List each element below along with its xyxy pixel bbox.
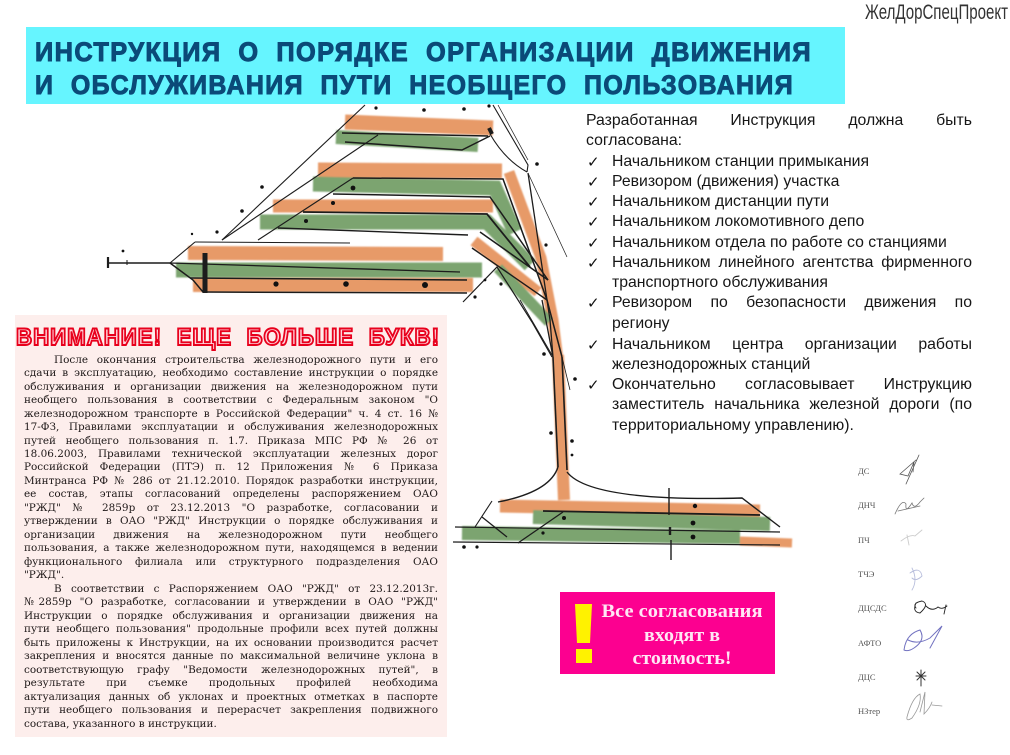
callout text: входят в	[644, 625, 720, 646]
approval list: железнодорожных станций	[612, 356, 810, 373]
warning body text: пути необщего пользования и перерасчет закрепления подвижного	[24, 704, 438, 716]
approval list: Ревизором по безопасности движения по	[612, 294, 972, 311]
warning body text: результате при съемке продольных профилей необходима	[24, 677, 438, 689]
station object dots	[122, 104, 697, 549]
warning body text: После окончания строительства железнодорожного пути и его	[54, 354, 438, 366]
warning body text: путей необщего пользования п. 1.7. Приказа МПС РФ № 26 от	[24, 434, 438, 446]
warning body text: функционального филиала или структурного подразделения ОАО	[24, 556, 438, 568]
approval list: транспортного обслуживания	[612, 274, 828, 291]
warning body text: В соответствии с Распоряжением ОАО "РЖД" от 23.12.2013г.	[54, 583, 438, 595]
track lines	[107, 105, 780, 560]
signature labels: ДС	[858, 466, 870, 476]
signature labels: ДНЧ	[858, 500, 876, 510]
signature labels	[858, 466, 887, 716]
approval list: Начальником дистанции пути	[612, 193, 829, 210]
signature labels: ТЧЭ	[858, 569, 875, 579]
signature strokes	[895, 455, 947, 720]
warning body text: обслуживания и организации движения на железнодорожном пути	[24, 380, 438, 392]
approval list: ✓	[587, 294, 600, 312]
callout text: Все согласования	[602, 601, 762, 622]
callout text: стоимость!	[632, 648, 732, 669]
signature labels: ДЦСДС	[858, 603, 887, 613]
warning body text: "РЖД" № 2859р от 23.12.2013 "О разработке, согласовании и	[24, 502, 438, 514]
approval list: Разработанная Инструкция должна быть	[586, 112, 972, 129]
warning body text: закрепления и вносятся данные по максимальной величине уклона в	[24, 650, 438, 662]
warning body text: Минтранса РФ № 286 от 21.12.2010. Порядок разработки инструкции,	[24, 475, 438, 487]
warning body text: организации движения на железнодорожном пути необщего	[24, 529, 438, 541]
callout text	[602, 601, 762, 669]
approval list: ✓	[587, 193, 600, 211]
approval list: Ревизором (движения) участка	[612, 173, 839, 190]
warning body text: Инструкции о порядке обслуживания и организации движения на	[24, 610, 438, 622]
title text	[35, 37, 812, 100]
signature labels: ДЦС	[858, 672, 876, 682]
warning heading: ВНИМАНИЕ! ЕЩЕ БОЛЬШЕ БУКВ!	[16, 324, 440, 351]
approval list	[586, 112, 972, 434]
approval list: ✓	[587, 376, 600, 394]
approval list: ✓	[587, 336, 600, 354]
approval list: территориальному управлению).	[612, 417, 854, 434]
approval list: заместитель начальника железной дороги (по	[612, 396, 972, 413]
callout: all approvals included	[560, 592, 775, 674]
warning body text: №2859р "О разработке, согласовании и утверждении в ОАО "РЖД"	[24, 596, 438, 608]
approval list: Начальником линейного агентства фирменного	[612, 254, 972, 271]
warning body text: актуализация данных об уклонах и проектных отметках в паспорте	[24, 691, 438, 703]
warning body text: 18.06.2003, Правилами технической эксплуатации железных дорог	[24, 448, 438, 460]
warning body text: Российской Федерации (ПТЭ) п. 12 Приложения № 6 Приказа	[24, 461, 438, 473]
warning body text: пользования, а также железнодорожном пути, находящемся в ведении	[24, 542, 438, 554]
approval list: ✓	[587, 173, 600, 191]
approval list: ✓	[587, 234, 600, 252]
approval list: согласована:	[586, 132, 682, 149]
warning body text: сдачи в эксплуатацию, необходимо составление инструкции о порядке	[24, 367, 438, 379]
marker bands: orange and green tracks	[176, 122, 792, 543]
approval list: ✓	[587, 213, 600, 231]
panel: more text warning	[15, 315, 447, 737]
warning body text: состава, указанного в инструкции.	[24, 718, 217, 730]
approval list: Окончательно согласовывает Инструкцию	[612, 376, 972, 393]
signature labels: ПЧ	[858, 535, 870, 545]
approval list: Начальником станции примыкания	[612, 153, 869, 170]
warning body text: 17-ФЗ, Правилами эксплуатации и обслуживания железнодорожных	[24, 421, 438, 433]
icon: yellow exclamation mark	[575, 604, 592, 663]
warning body text: ее состав, этапы согласований определены распоряжением ОАО	[24, 488, 438, 500]
approval list: Начальником отдела по работе со станциями	[612, 234, 947, 251]
warning body text: быть приложены к Инструкции, на их основании производится расчет	[24, 637, 438, 649]
warning body text: пути необщего пользования" продольные профили всех путей должны	[24, 623, 438, 635]
warning body text: "РЖД".	[24, 569, 64, 581]
signature labels: АФТО	[858, 638, 881, 648]
warning body text: необщего пользования в соответствии с Федеральным законом "О	[24, 394, 438, 406]
approval list: ✓	[587, 254, 600, 272]
warning body text	[24, 354, 438, 730]
title banner	[26, 27, 845, 104]
approval list: ✓	[587, 153, 600, 171]
warning body text: железнодорожном транспорте в Российской Федерации" ч. 4 ст. 16 №	[24, 408, 438, 420]
title text: ИНСТРУКЦИЯ О ПОРЯДКЕ ОРГАНИЗАЦИИ ДВИЖЕНИЯ	[35, 37, 812, 67]
approval list: Начальником центра организации работы	[612, 336, 972, 353]
title text: И ОБСЛУЖИВАНИЯ ПУТИ НЕОБЩЕГО ПОЛЬЗОВАНИЯ	[35, 70, 794, 100]
approval list: региону	[612, 315, 670, 332]
warning body text: утверждении в ОАО "РЖД" Инструкции о порядке обслуживания и	[24, 515, 438, 527]
approval list: Начальником локомотивного депо	[612, 213, 864, 230]
signature labels: НЗтер	[858, 706, 880, 716]
warning body text: соответствующую графу "Ведомости железнодорожных путей", в	[24, 664, 438, 676]
